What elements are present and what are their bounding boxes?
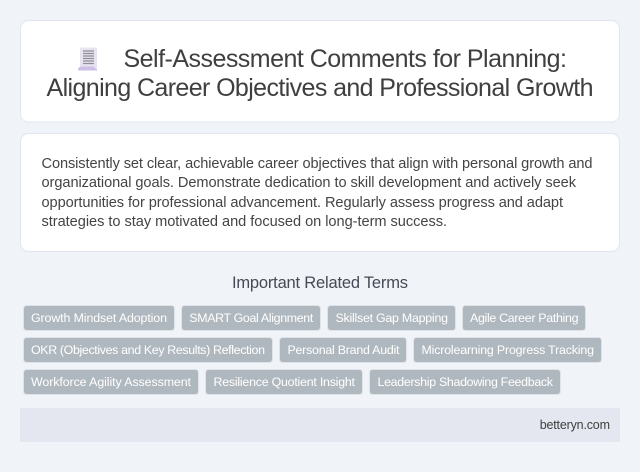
tag list xyxy=(24,306,602,394)
tag: Workforce Agility Assessment: Workforce Agility Assessment xyxy=(31,375,192,389)
tag: SMART Goal Alignment xyxy=(182,306,320,330)
panel: description card xyxy=(20,134,620,252)
tag: OKR Reflection: OKR (Objectives and Key Results) Reflection xyxy=(31,343,265,357)
tag: Resilience Quotient Insight xyxy=(206,370,362,394)
tag: Microlearning Progress Tracking xyxy=(414,338,602,362)
panel: header card xyxy=(20,20,620,122)
heading: important related terms: Important Related Terms xyxy=(232,274,408,292)
tag: Workforce Agility Assessment xyxy=(24,370,198,394)
description text: Consistently set clear, achievable career objectives that align with personal growth and xyxy=(42,156,592,172)
tag: Growth Mindset Adoption: Growth Mindset Adoption xyxy=(31,311,167,325)
tag: Skillset Gap Mapping: Skillset Gap Mapping xyxy=(336,311,448,325)
tag: Personal Brand Audit: Personal Brand Audit xyxy=(288,343,400,357)
description text: organizational goals. Demonstrate dedication to skill development and actively seek xyxy=(42,175,577,191)
footer bar xyxy=(20,408,620,442)
tag: Personal Brand Audit xyxy=(280,338,406,362)
icon: scroll document xyxy=(78,48,97,70)
tag: Skillset Gap Mapping xyxy=(328,306,456,330)
tag: Growth Mindset Adoption xyxy=(24,306,174,330)
tag: OKR Reflection xyxy=(24,338,272,362)
description text: opportunities for professional advancement. Regularly assess progress and adapt xyxy=(42,195,563,211)
tag: Agile Career Pathing xyxy=(462,306,586,330)
tag: Leadership Shadowing Feedback xyxy=(370,370,560,394)
tag: Microlearning Progress Tracking: Microlearning Progress Tracking xyxy=(422,343,594,357)
tag: Agile Career Pathing: Agile Career Pathing xyxy=(470,311,579,325)
tag: SMART Goal Alignment: SMART Goal Alignment xyxy=(189,311,314,325)
description text: strategies to stay motivated and focused on long-term success. xyxy=(42,214,447,230)
description text xyxy=(42,156,592,230)
tag: Leadership Shadowing Feedback: Leadership Shadowing Feedback xyxy=(378,375,554,389)
tag: Resilience Quotient Insight: Resilience Quotient Insight xyxy=(214,375,356,389)
title line 2: Aligning Career Objectives and Professional Growth xyxy=(46,74,594,102)
title line 1: Self-Assessment Comments for Planning: xyxy=(124,45,567,73)
footer source text: betteryn.com xyxy=(540,418,610,432)
